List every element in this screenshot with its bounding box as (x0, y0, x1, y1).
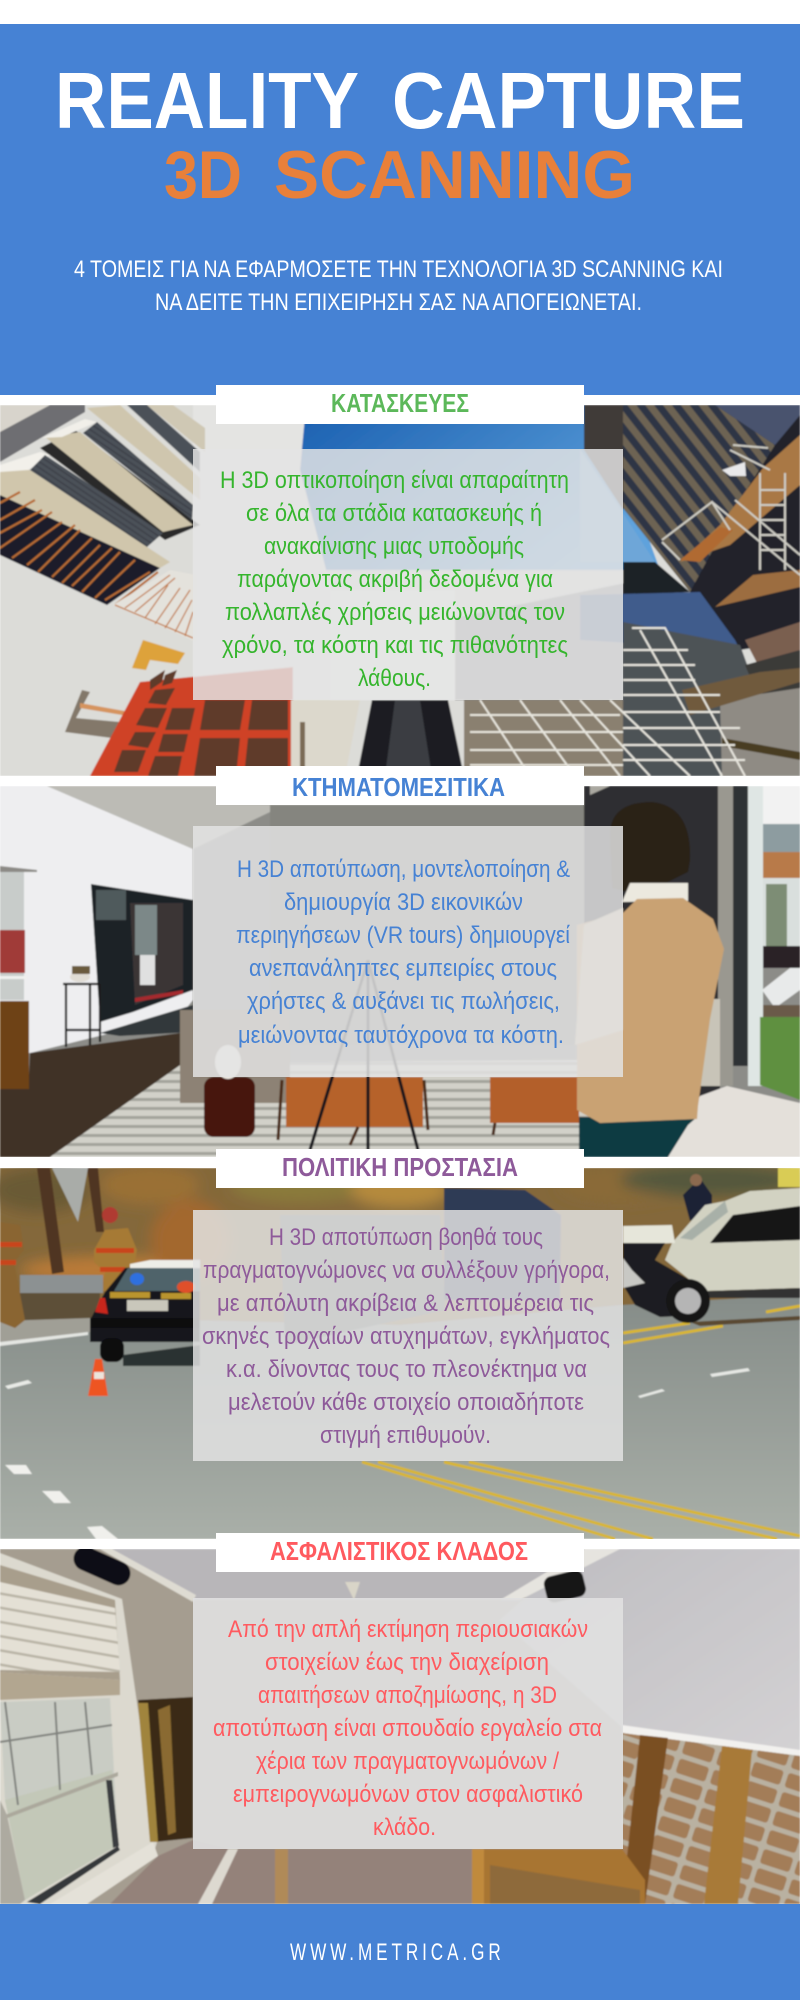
body text: real estate: δημιουργία 3D εικονικών (284, 889, 523, 916)
heading tab: construction (216, 385, 584, 424)
body text: civil protection: στιγμή επιθυμούν. (320, 1422, 491, 1449)
body text: construction: πολλαπλές χρήσεις μειώνοντας τον (225, 599, 565, 626)
subtitle: 3D Scanning: SCANNING (274, 137, 635, 213)
photo: traffic accident scene (0, 1164, 800, 1539)
panel: footer (0, 1904, 800, 2000)
heading tab: insurance: ΑΣΦΑΛΙΣΤΙΚΟΣ ΚΛΑΔΟΣ (270, 1536, 528, 1566)
body text: insurance (213, 1616, 602, 1841)
body text: civil protection: με απόλυτη ακρίβεια & λεπτομέρεια τις (217, 1290, 594, 1317)
text panel: construction (193, 449, 623, 700)
text panel: insurance (193, 1598, 623, 1849)
body text: civil protection (202, 1224, 610, 1449)
heading tab: real estate: ΚΤΗΜΑΤΟΜΕΣΙΤΙΚΑ (292, 772, 505, 802)
photo: damaged room (0, 1543, 800, 1904)
heading tab: insurance (216, 1533, 584, 1572)
photo: construction site (0, 405, 800, 776)
panel: header background (0, 24, 800, 395)
panel: insurance (0, 1533, 800, 1904)
heading tab: construction: ΚΑΤΑΣΚΕΥΕΣ (331, 388, 469, 418)
panel: construction (0, 385, 800, 776)
text panel: civil protection (193, 1210, 623, 1461)
heading tab: civil protection (216, 1149, 584, 1188)
body text: insurance: χέρια των πραγματογνωμόνων / (256, 1748, 559, 1775)
body text: insurance: Από την απλή εκτίμηση περιουσιακών (228, 1616, 588, 1643)
body text: real estate: χρήστες & αυξάνει τις πωλήσεις, (247, 988, 560, 1015)
heading tab: civil protection: ΠΟΛΙΤΙΚΗ ΠΡΟΣΤΑΣΙΑ (282, 1152, 518, 1182)
intro text: ΝΑ ΔΕΙΤΕ ΤΗΝ ΕΠΙΧΕΙΡΗΣΗ ΣΑΣ ΝΑ ΑΠΟΓΕΙΩΝΕΤΑΙ. (155, 289, 642, 316)
body text: real estate: ανεπανάληπτες εμπειρίες στους (249, 955, 557, 982)
body text: construction: σε όλα τα στάδια κατασκευής ή (246, 500, 542, 527)
subtitle: 3D Scanning: 3D (164, 137, 242, 213)
body text: real estate (236, 856, 570, 1049)
body text: real estate: μειώνοντας ταυτόχρονα τα κόστη. (238, 1022, 564, 1049)
text panel: real estate (193, 826, 623, 1077)
body text: civil protection: μελετούν κάθε στοιχείο οποιαδήποτε (228, 1389, 584, 1416)
body text: insurance: εμπειρογνωμόνων στον ασφαλιστικό (233, 1781, 583, 1808)
body text: insurance: απαιτήσεων αποζημίωσης, η 3D (258, 1682, 557, 1709)
body text: civil protection: σκηνές τροχαίων ατυχημάτων, εγκλήματος (202, 1323, 610, 1350)
body text: construction: ανακαίνισης μιας υποδομής (264, 533, 524, 560)
body text: construction: Η 3D οπτικοποίηση είναι απαραίτητη (220, 467, 569, 494)
panel: real estate (0, 766, 800, 1157)
body text: construction: χρόνο, τα κόστη και τις πιθανότητες (222, 632, 568, 659)
title: Reality Capture (55, 56, 745, 145)
body text: civil protection: Η 3D αποτύπωση βοηθά τους (269, 1224, 543, 1251)
body text: construction: λάθους. (358, 665, 431, 692)
heading tab: real estate (216, 766, 584, 805)
body text: insurance: αποτύπωση είναι σπουδαίο εργαλείο στα (213, 1715, 602, 1742)
footer website: WWW.METRICA.GR (290, 1939, 501, 1966)
photo: living room interior (0, 786, 800, 1157)
body text: insurance: στοιχείων έως την διαχείριση (265, 1649, 549, 1676)
body text: construction: παράγοντας ακριβή δεδομένα για (237, 566, 553, 593)
body text: insurance: κλάδο. (373, 1814, 436, 1841)
title: Reality Capture: CAPTURE (392, 56, 745, 145)
body text: real estate: Η 3D αποτύπωση, μοντελοποίηση & (237, 856, 570, 883)
intro text (74, 256, 723, 316)
title: Reality Capture: REALITY (55, 56, 359, 145)
body text: construction (220, 467, 569, 692)
panel: civil protection (0, 1149, 800, 1539)
body text: civil protection: κ.α. δίνοντας τους το πλεονέκτημα να (226, 1356, 587, 1383)
body text: real estate: περιηγήσεων (VR tours) δημιουργεί (236, 922, 570, 949)
body text: civil protection: πραγματογνώμονες να συλλέξουν γρήγορα, (203, 1257, 610, 1284)
